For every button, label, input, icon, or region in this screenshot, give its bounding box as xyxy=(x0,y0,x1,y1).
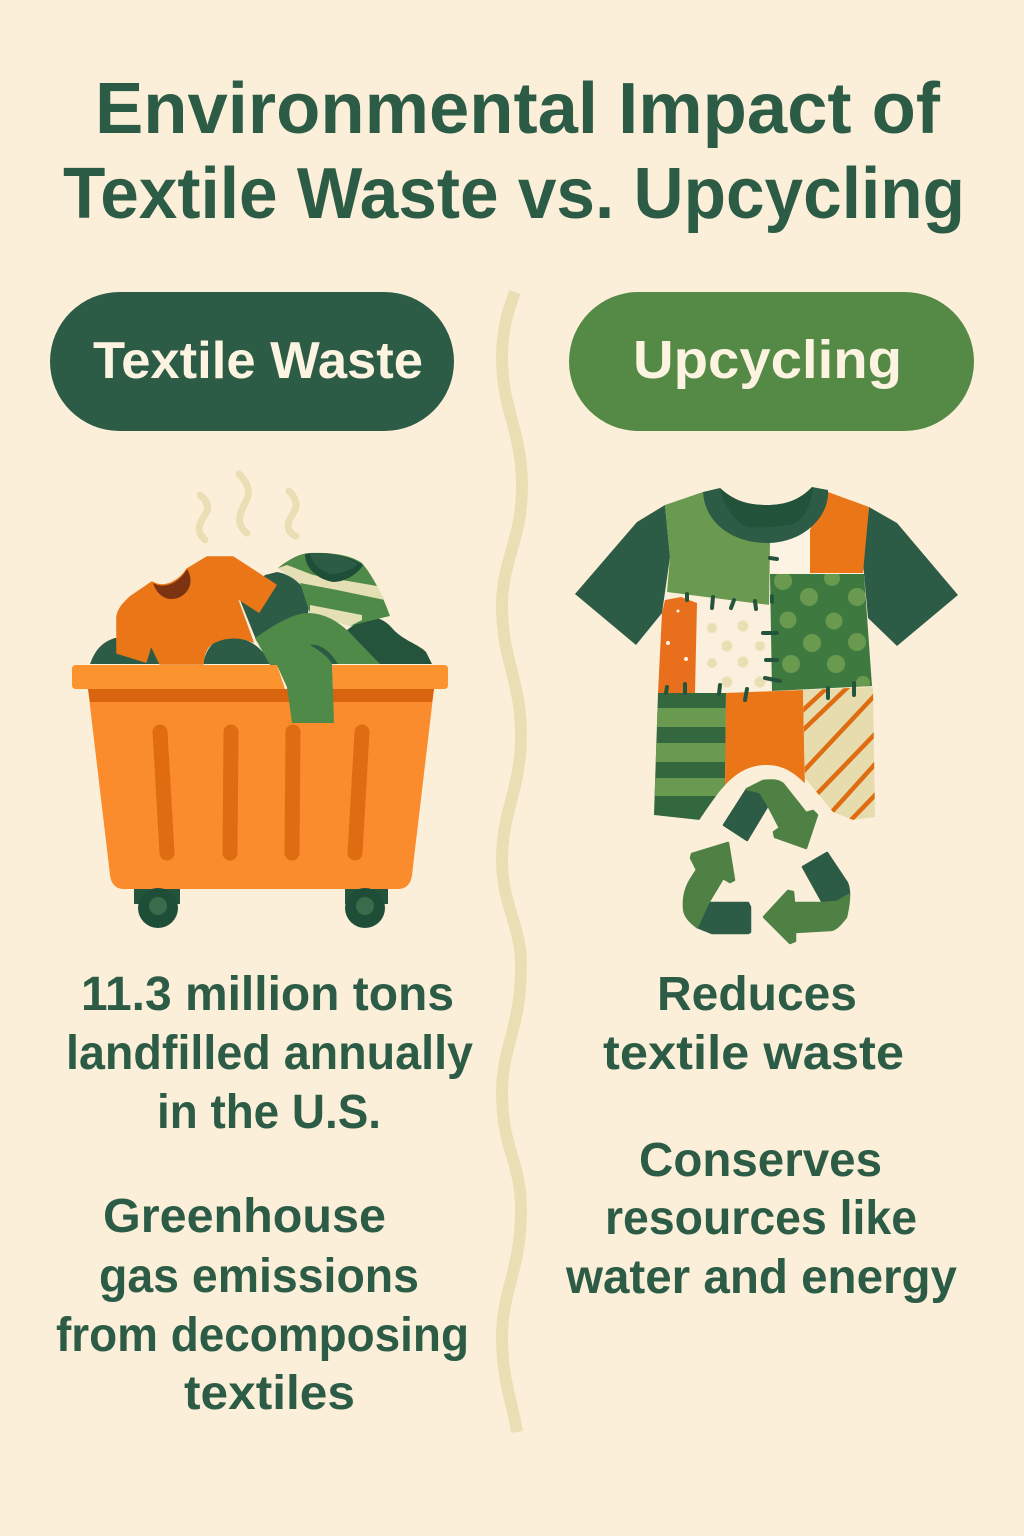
hanging cloth over rim xyxy=(277,665,334,723)
top arrow xyxy=(724,780,817,848)
dumpster body xyxy=(88,689,434,889)
striped cloth xyxy=(278,553,390,626)
green cloth xyxy=(255,613,380,723)
sleeves xyxy=(575,505,958,646)
dumpster band xyxy=(88,689,434,702)
icon: dumpster full of clothes xyxy=(72,553,448,928)
text block: conserves resources: Conserves xyxy=(639,1134,882,1187)
icon: stink lines xyxy=(199,474,296,540)
wavy divider xyxy=(502,292,522,1432)
text block: landfill statistic: in the U.S. xyxy=(157,1086,381,1139)
text block: conserves resources xyxy=(565,1134,957,1304)
text block: landfill statistic: 11.3 million tons xyxy=(81,968,454,1021)
dumpster ribs xyxy=(160,732,362,853)
orange shirt xyxy=(117,557,276,664)
text block: reduces textile waste xyxy=(603,968,904,1080)
pill heading: Upcycling xyxy=(569,292,974,431)
icon: patchwork shirt xyxy=(575,487,958,826)
stitches xyxy=(666,558,854,700)
text block: landfill statistic xyxy=(66,968,473,1139)
collar xyxy=(703,487,828,543)
text block: greenhouse gas emissions: textiles xyxy=(184,1367,355,1420)
dumpster rim xyxy=(72,665,448,689)
diagonal striped patch xyxy=(803,687,875,820)
title xyxy=(63,69,965,234)
top patches xyxy=(665,492,869,605)
wheels xyxy=(134,888,388,928)
orange dotted patch xyxy=(658,597,697,693)
text block: landfill statistic: landfilled annually xyxy=(66,1027,473,1080)
pill heading: Textile Waste xyxy=(50,292,454,431)
text block: greenhouse gas emissions: gas emissions xyxy=(99,1250,419,1303)
pill heading: Upcycling: Upcycling xyxy=(633,330,902,390)
polka dot patch xyxy=(770,570,872,691)
right arrow xyxy=(764,853,849,943)
title: Environmental Impact of xyxy=(95,69,941,149)
pill heading: Textile Waste: Textile Waste xyxy=(93,332,423,390)
text block: greenhouse gas emissions: Greenhouse xyxy=(103,1190,386,1243)
title: Textile Waste vs. Upcycling xyxy=(63,154,965,234)
icon: recycle arrows xyxy=(684,780,849,943)
text block: reduces textile waste: Reduces xyxy=(657,968,857,1021)
arch cutout xyxy=(695,765,858,826)
text block: conserves resources: resources like xyxy=(605,1192,917,1245)
left arrow xyxy=(684,843,750,933)
text block: reduces textile waste: textile waste xyxy=(603,1027,904,1080)
orange patch xyxy=(725,690,805,790)
text block: conserves resources: water and energy xyxy=(565,1251,957,1304)
text block: greenhouse gas emissions: from decomposing xyxy=(56,1309,469,1362)
text block: greenhouse gas emissions xyxy=(56,1190,469,1420)
dark clothes pile xyxy=(90,572,432,664)
cream dotted patch xyxy=(707,602,769,688)
striped patch xyxy=(654,693,726,820)
